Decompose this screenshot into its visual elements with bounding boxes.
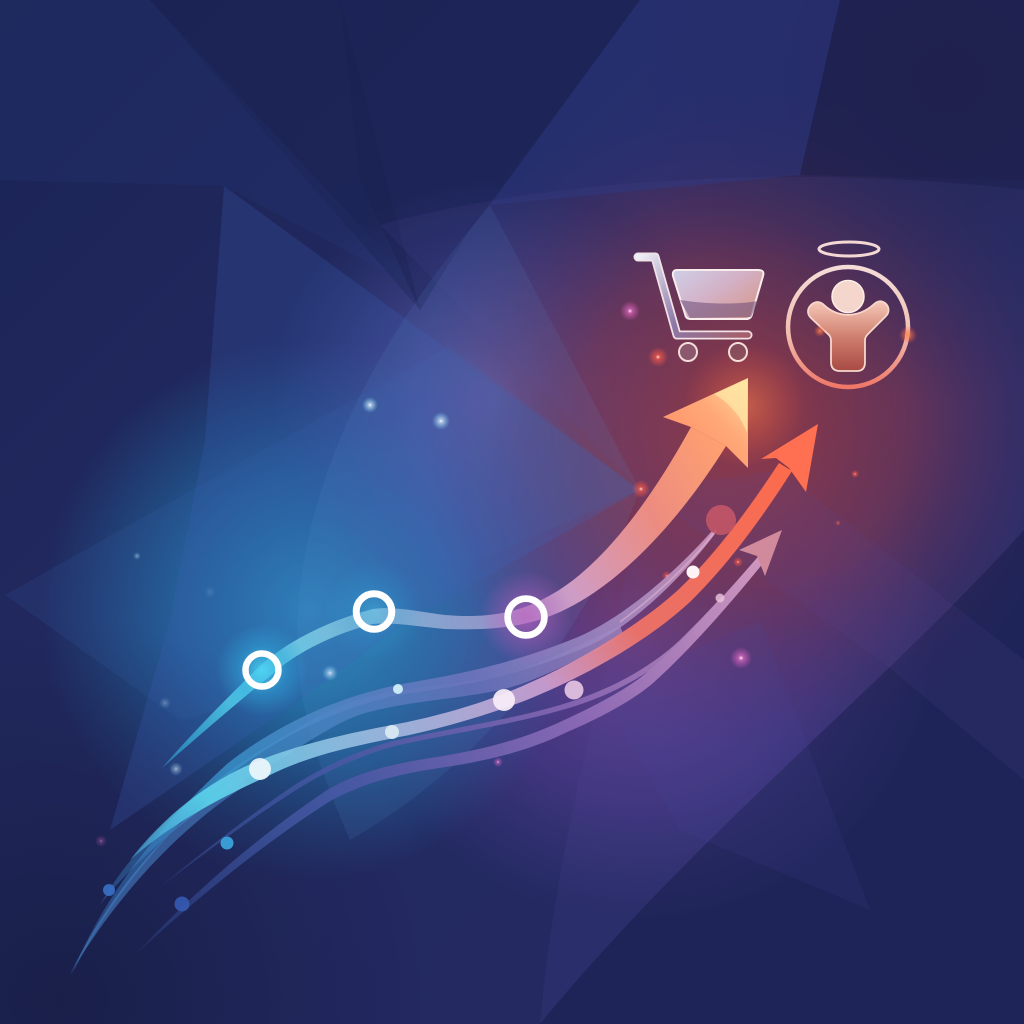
glow: second ring [324,561,424,661]
cart frame inner [638,257,748,335]
circle outline [788,267,908,387]
ring glint [899,326,917,344]
main arrow ribbon [162,427,726,768]
sparkles [95,301,859,847]
arrowhead: red [761,424,818,492]
main growth arrow [162,378,748,768]
glow: third ring [480,571,572,663]
arrowhead highlight [714,379,747,432]
basket shadow sheen [680,300,758,318]
ribbon: faint tail [70,778,248,975]
icon: shopping cart [638,257,763,361]
ribbon: red arrow strand with bright blue start [130,463,792,860]
ring 2 [356,594,392,629]
arrowhead: mauve [739,530,782,576]
glow: first ring [216,624,308,716]
cart basket [673,270,763,319]
cart frame outline [638,257,748,335]
ribbon: thin strand [160,596,725,887]
cart wheels [679,343,697,361]
head [832,280,864,312]
body with raised arms [808,301,889,371]
ribbon: lower violet strand [137,552,768,953]
ribbon: second blue strand [100,626,624,905]
ring 1 [246,654,278,686]
icon: customer with halo [788,242,917,387]
path dots [103,505,736,912]
secondary ribbons [70,463,792,975]
milestone rings [216,561,572,716]
main arrowhead [663,378,748,468]
ribbon: upper blue strand [72,531,715,975]
ribbon: thin connector to large dot [620,530,716,622]
inner glow [814,325,826,337]
ring 3 [508,599,544,635]
halo [819,242,879,256]
